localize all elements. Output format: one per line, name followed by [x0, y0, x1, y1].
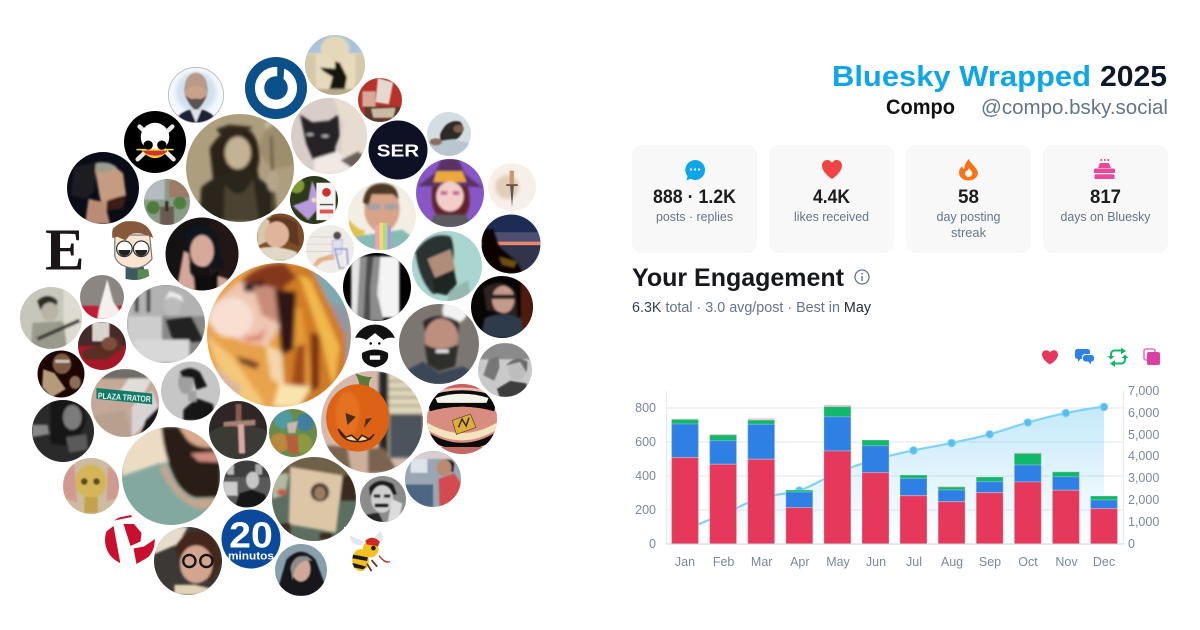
avatar: woman with scarf: [257, 214, 304, 260]
avatar: cat in paper bag: [272, 457, 356, 541]
right axis labels: 5,000: [1128, 428, 1159, 442]
avatar: bearded painting: [67, 152, 139, 224]
avatar: woman with guitar: [20, 287, 82, 349]
left axis labels: 800: [635, 401, 656, 415]
right axis labels: 2,000: [1128, 493, 1159, 507]
avatar cloud: [20, 35, 540, 596]
left axis labels: [635, 401, 656, 551]
avatar: lips with gold tooth: [427, 384, 497, 454]
icon: speech bubble: [685, 160, 705, 180]
avatar: cartoon man: [112, 221, 154, 280]
avatar: small old man: [224, 460, 270, 508]
avatar: 20 minutos logo: [222, 510, 280, 568]
engagement summary: 6.3K total · 3.0 avg/post · Best in May: [632, 300, 872, 316]
avatar: flower and poster: [290, 176, 338, 224]
avatar: hooded woman: [275, 544, 327, 596]
display name: Compo: [886, 96, 955, 119]
avatar: golden skull map: [63, 458, 119, 514]
avatar: black cat: [291, 98, 367, 174]
avatar: man with rainbow: [348, 182, 416, 250]
right axis labels: 1,000: [1128, 515, 1159, 529]
avatar: cartoon bee: [344, 527, 390, 572]
icon: flame: [959, 159, 978, 180]
month labels: May: [826, 555, 851, 569]
avatar: E logo: E: [45, 217, 84, 283]
right axis labels: 7,000: [1128, 384, 1159, 398]
gridlines: [666, 408, 1124, 510]
month labels: [675, 555, 1115, 569]
avatar: blue ring logo: [245, 57, 307, 119]
avatar: red poster: [358, 78, 402, 122]
title: Bluesky Wrapped: [832, 61, 1091, 93]
avatar: sunglasses man: [38, 350, 84, 398]
handle: @compo.bsky.social: [981, 96, 1168, 119]
heading: your engagement: Your Engagement: [632, 264, 845, 292]
panel: day posting streak: day posting: [936, 209, 1000, 224]
left axis labels: 400: [635, 469, 656, 483]
panel: days on Bluesky: 817: [1090, 187, 1121, 208]
month labels: Oct: [1018, 555, 1038, 569]
icon: reposts: [1108, 348, 1128, 367]
avatar: pirate skull: [124, 111, 186, 173]
avatar: black and white woman: [32, 400, 94, 462]
avatar: woman with black glasses: [154, 527, 222, 595]
right axis labels: [1128, 384, 1159, 551]
avatar: SER radio logo: SER: [377, 141, 419, 160]
avatar: man in suit: [168, 67, 224, 123]
avatar: Rosie fist woman: [478, 343, 532, 397]
avatar: black and white hair: [343, 253, 411, 321]
panel: day posting streak: streak: [951, 225, 986, 240]
avatar: SER radio logo: [368, 120, 428, 180]
icon: info: [855, 270, 869, 284]
avatar: sunset: [482, 214, 540, 274]
right axis labels: 3,000: [1128, 471, 1159, 485]
right axis labels: 4,000: [1128, 449, 1159, 463]
chart legend: [1042, 348, 1160, 367]
avatar: cartoon moustache: [355, 324, 395, 368]
icon: quotes: [1144, 349, 1160, 365]
avatar: 20 minutos logo: minutos: [228, 551, 274, 563]
avatar: dark-haired woman: [166, 218, 238, 290]
avatar: curly-haired man on teal: [412, 231, 482, 301]
month labels: Apr: [790, 555, 810, 569]
avatar: pumpkin head: [321, 371, 423, 473]
cumulative area: [685, 407, 1104, 544]
month labels: Dec: [1093, 555, 1115, 569]
month labels: Nov: [1055, 555, 1078, 569]
avatar: Taj Mahal figure: [305, 35, 365, 95]
left axis labels: 600: [635, 435, 656, 449]
avatar: 20 minutos logo: 20: [229, 514, 273, 555]
avatar: chimp: [427, 112, 471, 156]
avatar: chair sketch: [306, 225, 354, 273]
right axis labels: 0: [1128, 537, 1135, 551]
panel: likes received: likes received: [794, 209, 869, 224]
avatar: reclining on red: [78, 322, 126, 370]
avatar: witch illustration: [416, 159, 484, 227]
avatar: man in red shirt: [405, 451, 461, 507]
month labels: Mar: [751, 555, 772, 569]
avatar: dark figure with cross: [209, 401, 267, 459]
avatar: garden path: [144, 179, 190, 225]
icon: heart: [822, 160, 842, 179]
cumulative line: [685, 403, 1108, 528]
panel: days on Bluesky: [1043, 145, 1168, 253]
avatar: E logo: [46, 230, 82, 270]
avatar: white hood red cape: [80, 275, 124, 319]
month labels: Feb: [713, 555, 734, 569]
panel: posts and replies: posts · replies: [656, 209, 733, 224]
avatar: laughing bearded man: [399, 304, 479, 384]
icon: replies: [1075, 349, 1094, 364]
panel: posts and replies: 888 · 1.2K: [653, 187, 736, 208]
avatar: Victorian woman: [186, 114, 294, 222]
panel: day posting streak: [906, 145, 1031, 253]
stacked bars: [672, 405, 1118, 544]
month labels: Jan: [675, 555, 695, 569]
chart: monthly engagement: [635, 384, 1159, 569]
right axis labels: 6,000: [1128, 406, 1159, 420]
panel: days on Bluesky: days on Bluesky: [1060, 209, 1151, 224]
icon: birthday cake: [1094, 159, 1115, 179]
panel: likes received: [769, 145, 894, 253]
avatar: Groucho Marx: [360, 476, 406, 522]
avatar: main profile woman: [207, 263, 351, 407]
month labels: Jul: [906, 555, 922, 569]
avatar: profile man: [161, 362, 220, 420]
icon: likes: [1042, 350, 1058, 364]
panel: likes received: 4.4K: [813, 187, 850, 208]
avatar: P logo: [105, 515, 155, 564]
panel: day posting streak: 58: [958, 187, 979, 208]
left axis labels: 200: [635, 503, 656, 517]
avatar: beard close-up: [122, 427, 220, 525]
panel: posts and replies: [632, 145, 757, 253]
month labels: Aug: [941, 555, 963, 569]
left axis labels: 0: [649, 537, 656, 551]
title: 2025: [1100, 61, 1167, 93]
avatar: old man in bookshop: [127, 285, 205, 363]
avatar: woman with glasses on black: [471, 276, 533, 338]
avatar: dagger: [488, 163, 536, 211]
month labels: Jun: [866, 555, 886, 569]
month labels: Sep: [979, 555, 1001, 569]
avatar: Plaza Trator sign: [91, 369, 159, 437]
avatar: colourful drawing: [269, 409, 317, 457]
